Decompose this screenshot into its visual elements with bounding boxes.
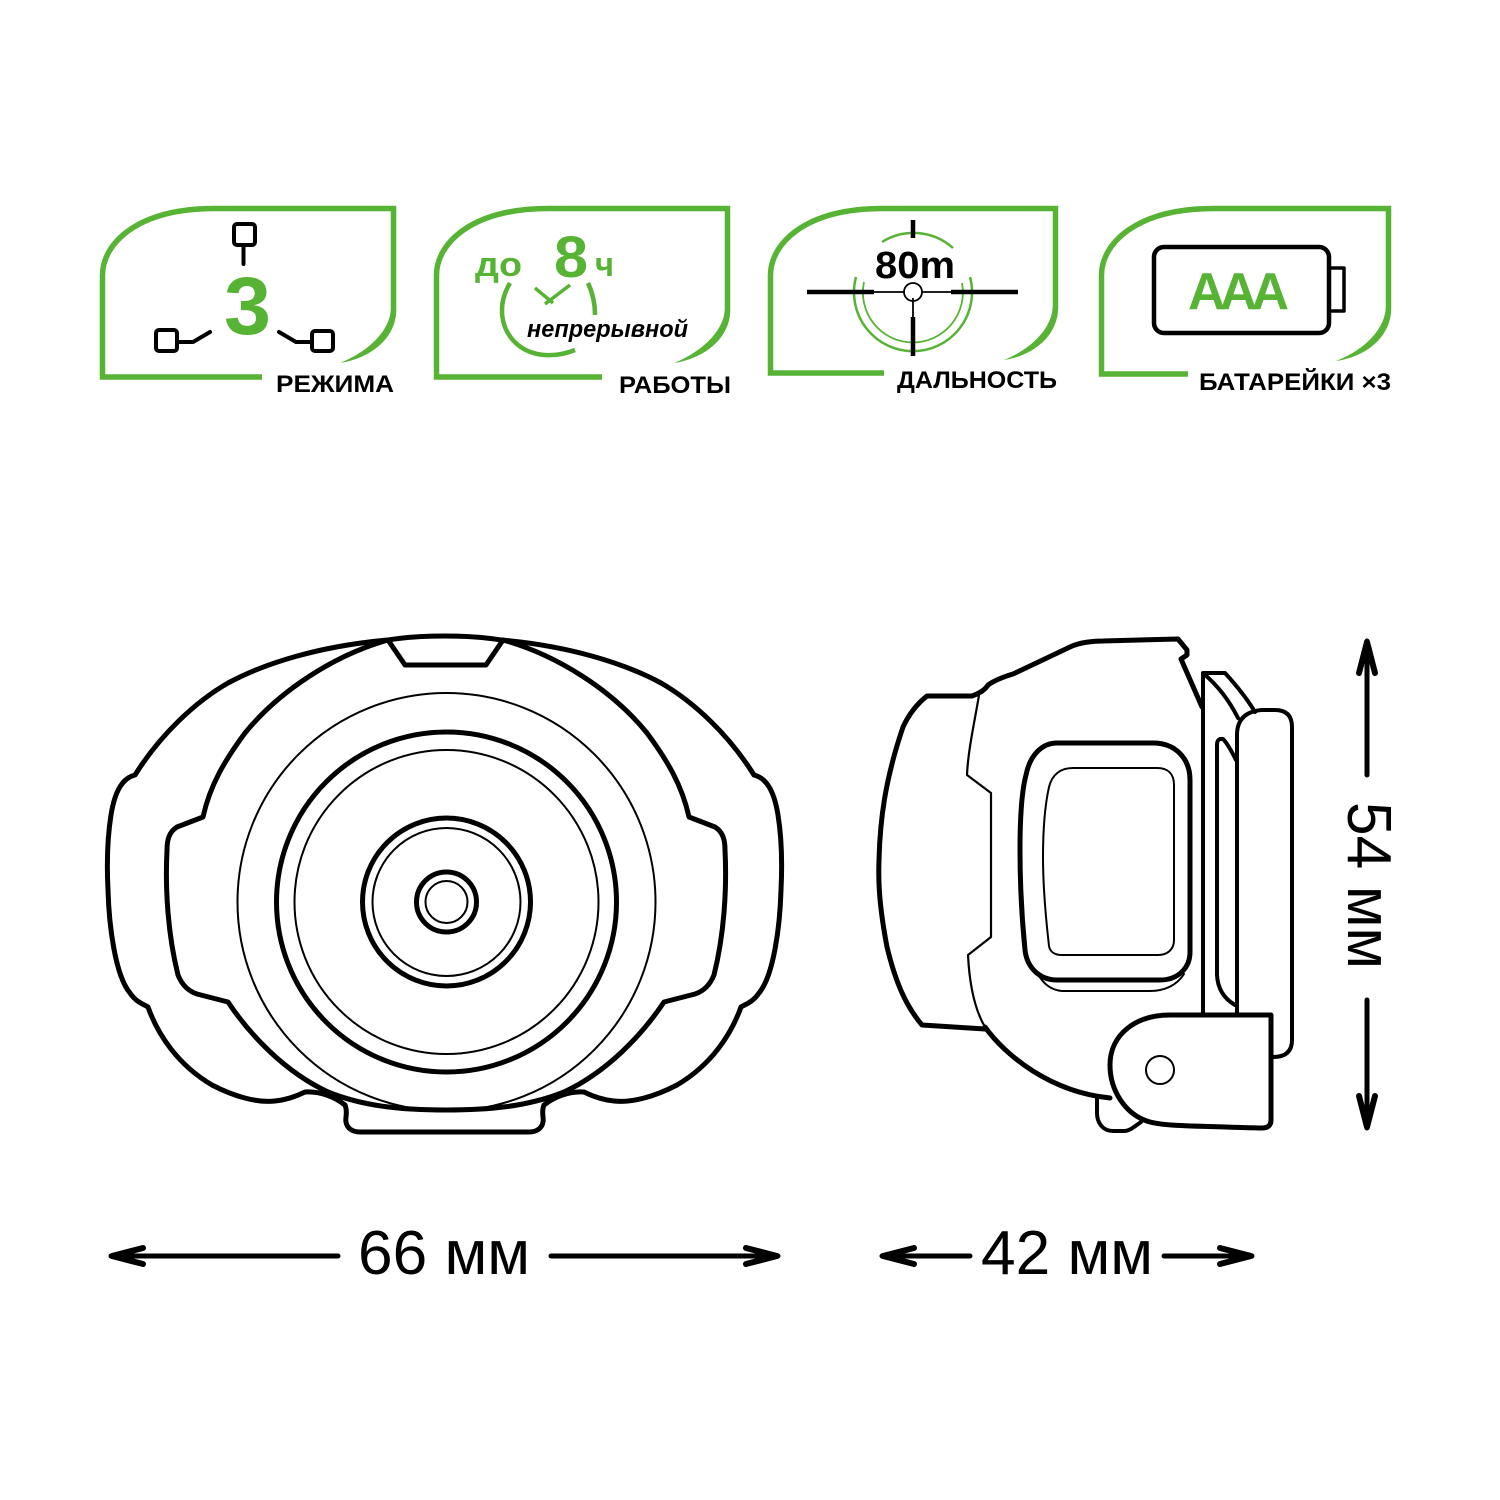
icon: clock <box>502 283 595 355</box>
panel frame: range <box>770 208 1058 373</box>
side view of headlamp <box>879 639 1292 1131</box>
number: 3: 3 <box>224 261 271 352</box>
arrow right <box>1164 1248 1252 1264</box>
dimension: height 54 mm <box>1334 641 1403 1128</box>
side body panel seam <box>967 695 991 1027</box>
text: continuous: непрерывной <box>527 316 688 343</box>
icon: crosshair <box>807 220 1018 356</box>
lens rings <box>238 693 656 1111</box>
label: batteries x3: БАТАРЕЙКИ ×3 <box>1199 368 1391 396</box>
front inner housing <box>166 640 726 1110</box>
arrow left <box>111 1248 338 1264</box>
text: up to: до <box>475 246 522 284</box>
dimension: depth 42 mm <box>882 1219 1252 1288</box>
arrow up <box>1359 641 1375 775</box>
text: hours: ч <box>595 246 614 284</box>
hinge pin <box>1146 1056 1174 1084</box>
panel: run time <box>436 208 731 399</box>
value 54 mm: 54 мм <box>1334 802 1403 969</box>
label: modes: РЕЖИМА <box>276 371 394 398</box>
text: 80 m: 80m <box>875 245 955 287</box>
value 42 mm: 42 мм <box>981 1219 1153 1288</box>
front outer housing <box>107 636 782 1132</box>
icon: battery <box>1154 247 1344 333</box>
side clip and plate <box>1203 673 1292 1057</box>
label: range: ДАЛЬНОСТЬ <box>897 367 1057 394</box>
side body <box>879 639 1202 1098</box>
number: 8: 8 <box>554 225 588 290</box>
panel: modes <box>102 208 396 398</box>
panel frame: modes <box>102 208 396 377</box>
arrow right <box>551 1248 778 1264</box>
side foot <box>1097 1098 1141 1131</box>
text: AAA: AAA <box>1188 263 1289 321</box>
arrow left <box>882 1248 970 1264</box>
side hinge <box>1110 1015 1271 1128</box>
arrow down <box>1359 1000 1375 1128</box>
front view of headlamp <box>107 636 782 1132</box>
dimension: width 66 mm <box>111 1219 778 1288</box>
panel frame: batteries <box>1102 208 1391 374</box>
value 66 mm: 66 мм <box>358 1219 530 1288</box>
label: operation: РАБОТЫ <box>619 372 731 399</box>
panel: batteries <box>1102 208 1391 396</box>
side window <box>1020 743 1190 991</box>
panel frame: run time <box>436 208 730 377</box>
icon: three switch positions <box>156 224 333 351</box>
panel: range <box>770 208 1058 394</box>
